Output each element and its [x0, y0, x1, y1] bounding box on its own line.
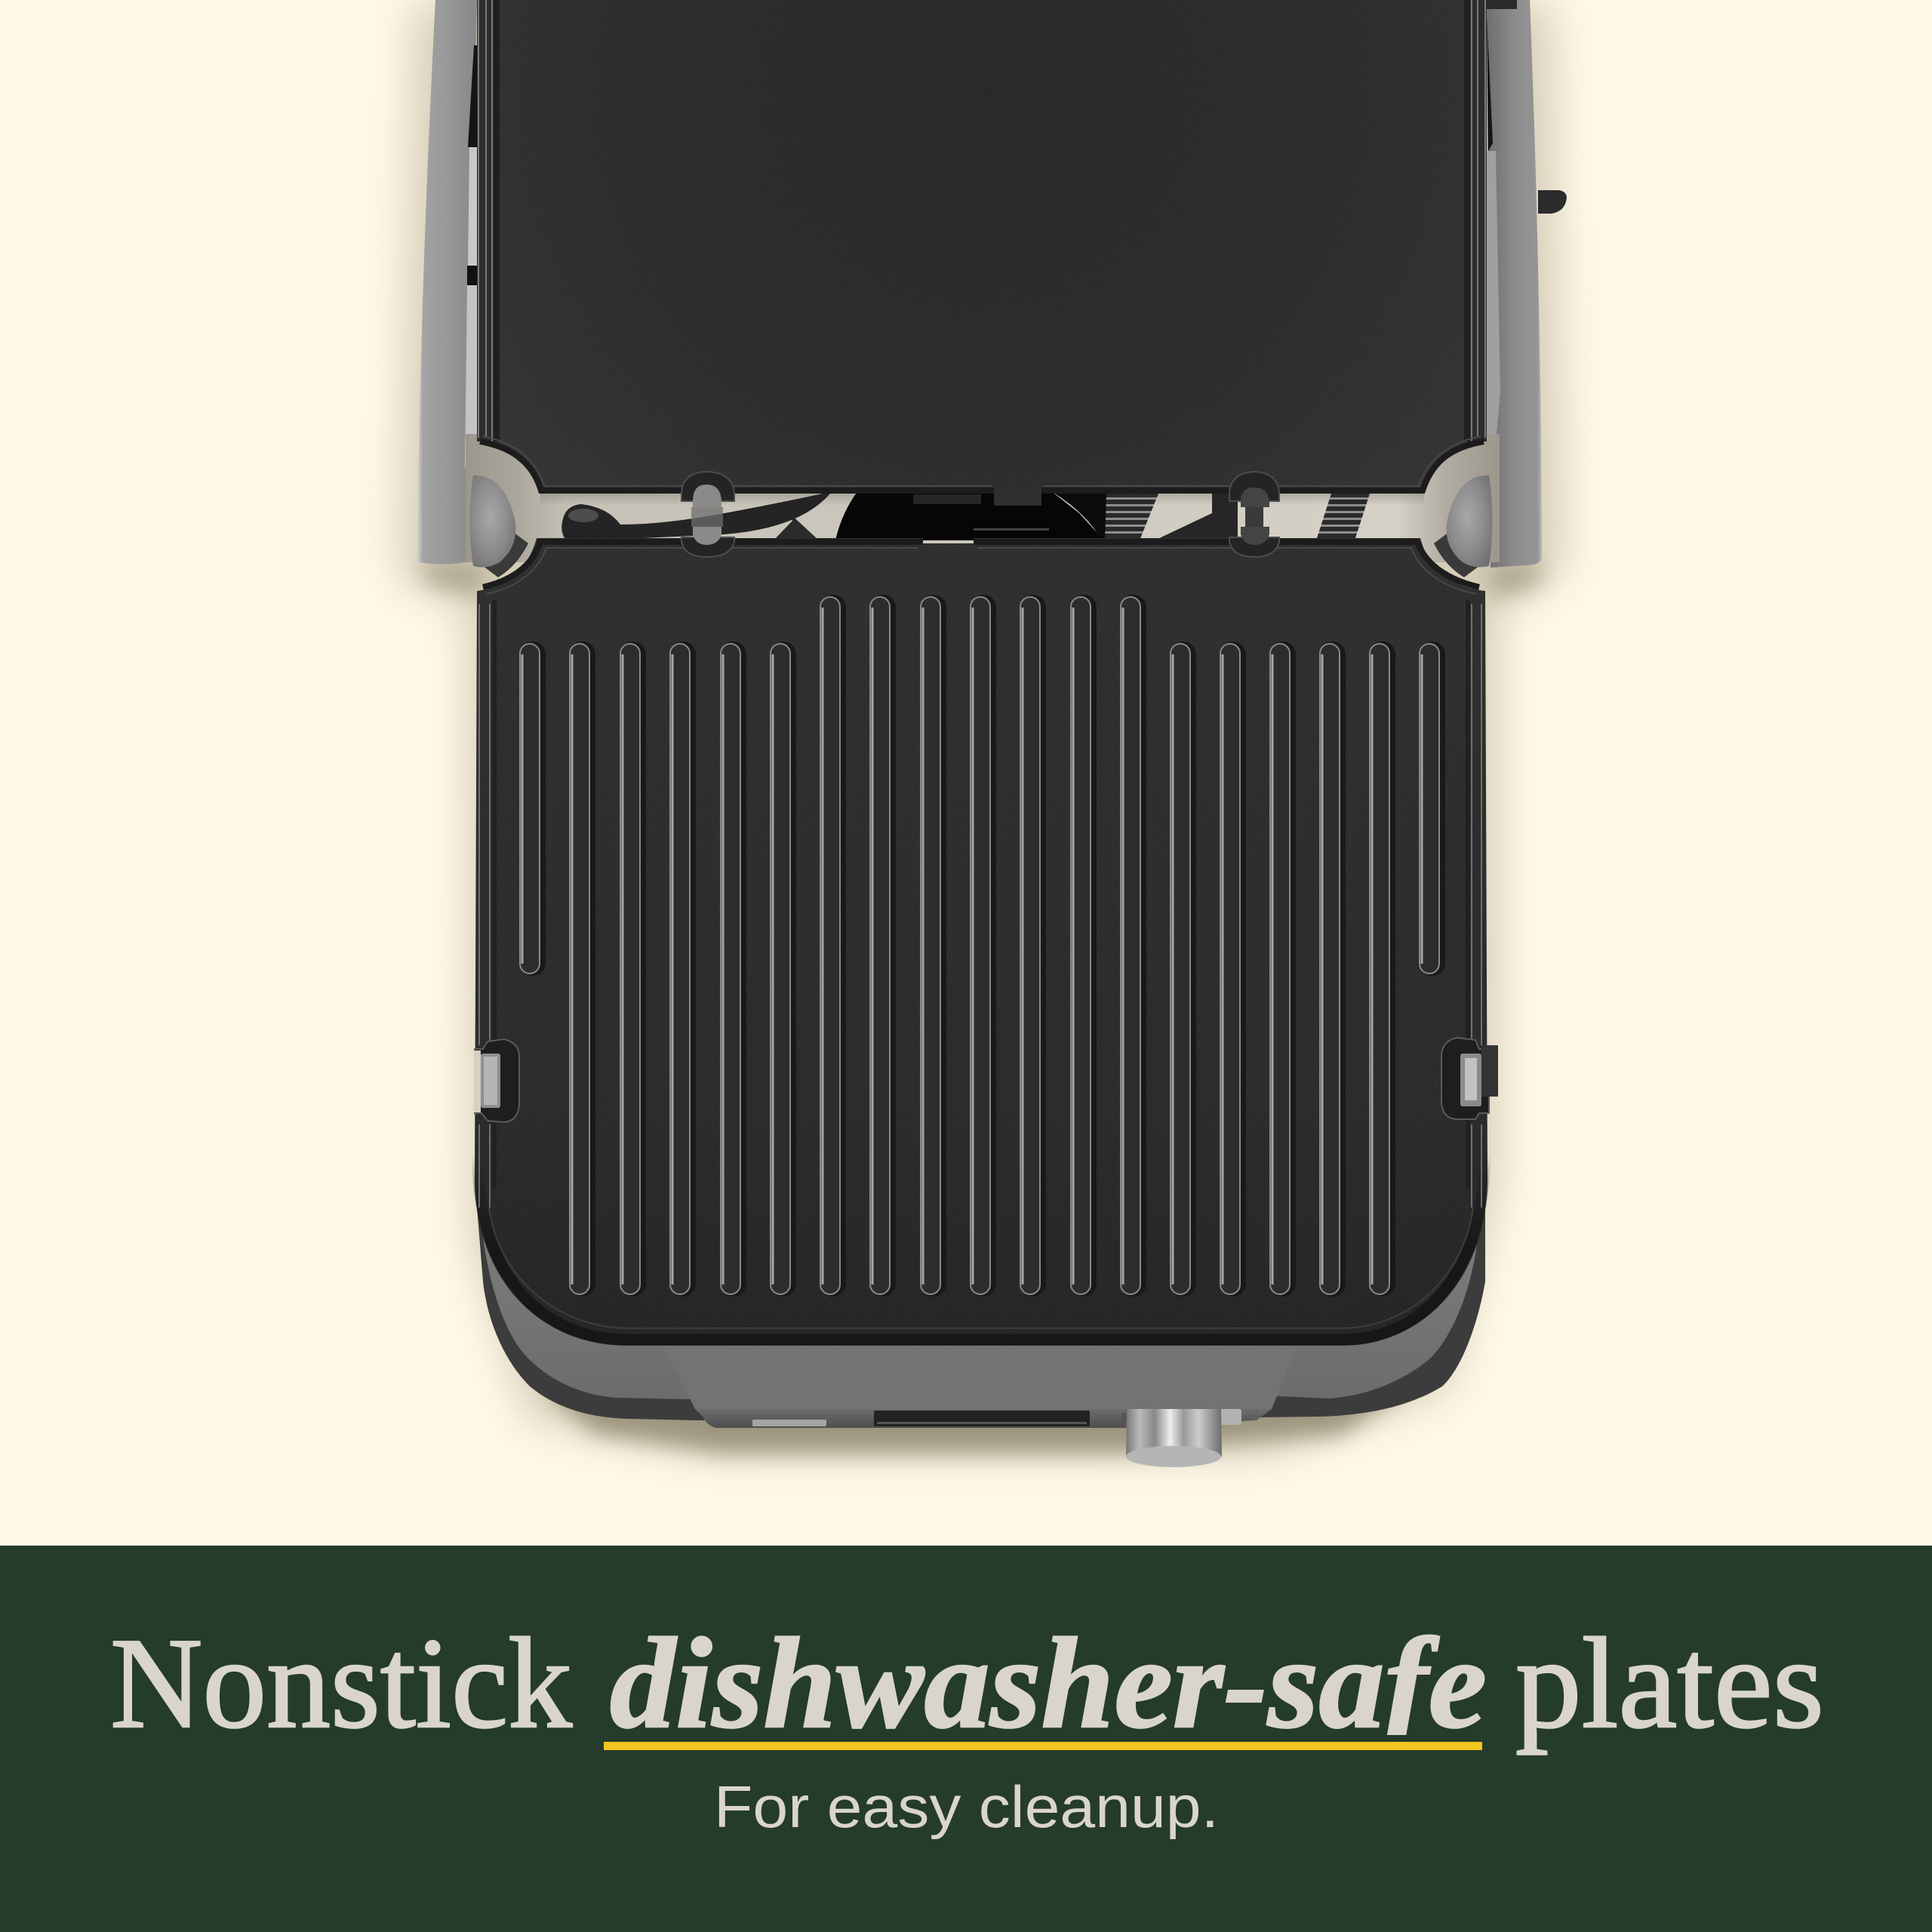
lower grill plate	[474, 528, 1498, 1351]
gap between plates	[466, 434, 1500, 562]
hinge clips	[681, 472, 1279, 557]
front control panel	[662, 1343, 1298, 1428]
base body below lower plate	[477, 1208, 1485, 1420]
side handle nub	[1538, 190, 1567, 214]
green caption band	[0, 1546, 1932, 1932]
headline emphasis: dishwasher-safe: dishwasher-safe	[610, 1612, 1487, 1755]
button	[752, 1420, 826, 1426]
headline	[113, 1635, 1820, 1755]
headline word: Nonstick: Nonstick	[110, 1612, 572, 1755]
display slot	[874, 1411, 1090, 1426]
yellow underline	[604, 1742, 1482, 1750]
grill stand: right arm	[1487, 0, 1542, 568]
top griddle plate	[477, 0, 1488, 509]
subheading: For easy cleanup.	[714, 1774, 1219, 1840]
left hinge dome	[469, 475, 528, 577]
cream background	[0, 0, 1932, 1546]
raised grill ribs	[519, 595, 1445, 1297]
left plate release clip	[474, 1039, 519, 1122]
right hinge dome	[1434, 475, 1493, 577]
right plate release clip	[1441, 1038, 1498, 1119]
soft product shadow	[400, 0, 1564, 1453]
grill stand: left arm	[417, 0, 477, 565]
spring left	[1105, 494, 1158, 540]
headline word: plates: plates	[1515, 1612, 1824, 1755]
hinge mechanism: cord, brackets and springs	[561, 491, 1370, 540]
control knob	[1121, 1409, 1241, 1467]
spring right	[1316, 494, 1370, 540]
